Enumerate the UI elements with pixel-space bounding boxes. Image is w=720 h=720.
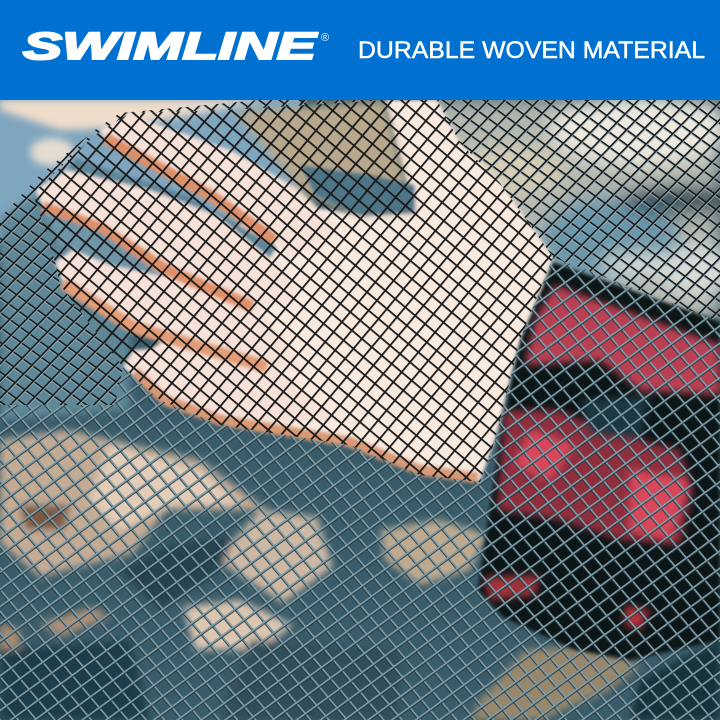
blue gaps between fingers [67, 158, 277, 258]
palm and wrist [123, 100, 553, 482]
heading: durable woven material: DURABLE WOVEN MATERIAL [358, 37, 705, 64]
brand logo: Swimline: ® [321, 32, 329, 44]
brand logo: Swimline: SWIMLINE [23, 26, 319, 68]
left blue cover behind fingers [0, 175, 130, 420]
finger one [98, 116, 319, 240]
header band [0, 0, 720, 100]
lower deck stones [0, 430, 720, 720]
hand [35, 100, 553, 482]
upper right mottled background [420, 95, 720, 320]
net over upper area [0, 100, 720, 405]
sky and clouds [0, 100, 300, 240]
finger three [53, 248, 272, 360]
red plaid bag [478, 262, 720, 660]
finger four [122, 346, 272, 420]
net over hand [34, 100, 552, 482]
brand logo: Swimline [23, 26, 329, 68]
orange finger shadows [105, 138, 275, 240]
wedge behind palm [235, 100, 415, 216]
finger two [34, 168, 272, 298]
net over lower area [0, 257, 720, 720]
